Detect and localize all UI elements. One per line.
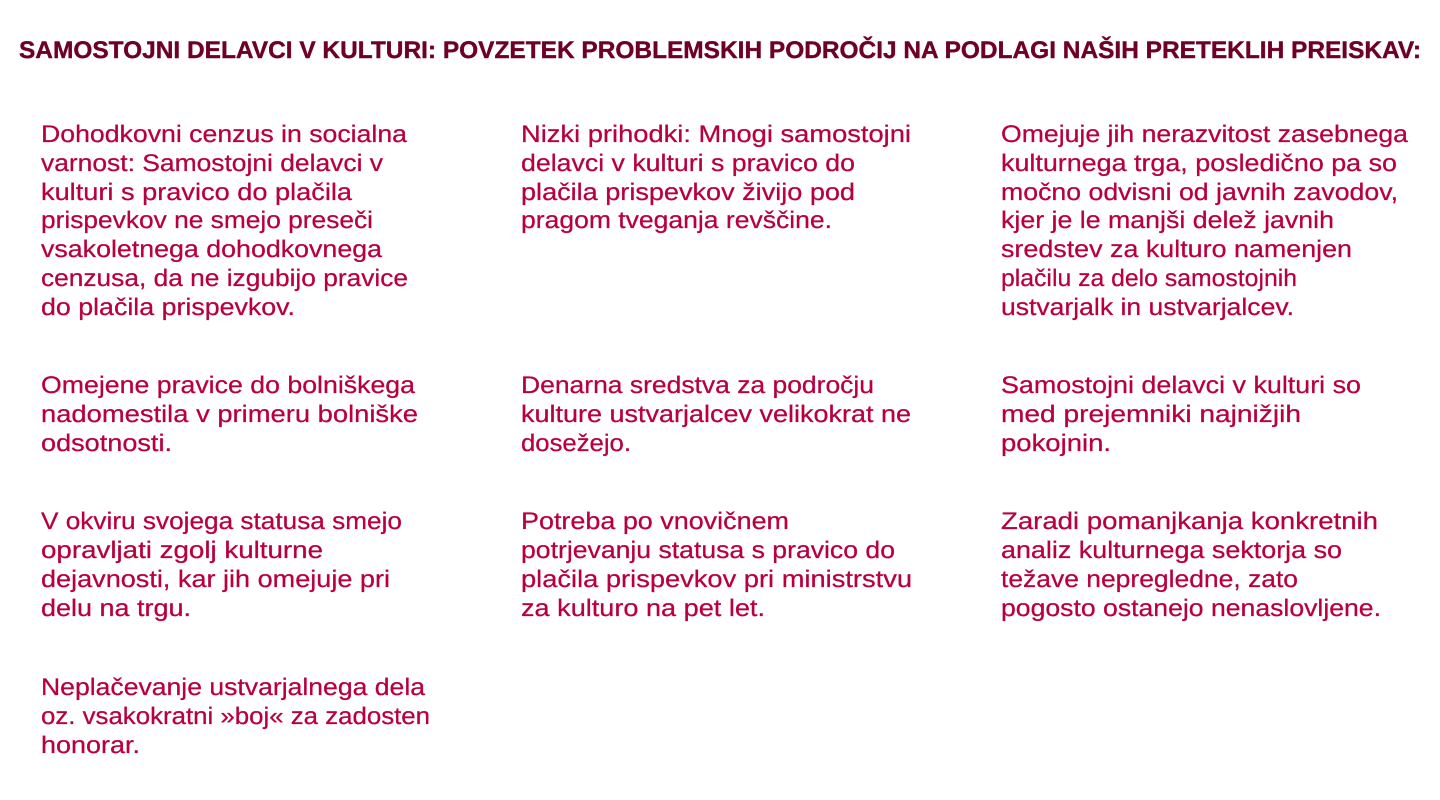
text block: low income: pragom tveganja revščine.	[521, 207, 832, 234]
text block: undeveloped private market	[1001, 121, 1409, 321]
text block: low income: delavci v kulturi s pravico do	[521, 150, 855, 177]
text block: low income: Nizki prihodki: Mnogi samostojni	[521, 121, 911, 148]
text block: status reconfirmation: potrjevanju statusa s pravico do	[521, 537, 895, 564]
text block: funds rarely reach creators	[521, 372, 911, 457]
text block: lowest pensions	[1001, 372, 1361, 457]
text block: limited sick pay: odsotnosti.	[41, 430, 172, 457]
text block: status reconfirmation: plačila prispevkov pri ministrstvu	[521, 566, 912, 593]
text block: undeveloped private market: kulturnega trga, posledično pa so	[1001, 150, 1397, 177]
text block: lack of analyses: pogosto ostanejo nenaslovljene.	[1001, 595, 1381, 622]
text block: income census and social security: kulturi s pravico do plačila	[41, 179, 353, 206]
text block: limited sick pay: nadomestila v primeru bolniške	[41, 401, 418, 428]
text block: funds rarely reach creators: kulture ustvarjalcev velikokrat ne	[521, 401, 911, 428]
text block: unpaid creative work: oz. vsakokratni »boj« za zadosten	[41, 703, 430, 730]
text block: funds rarely reach creators: dosežejo.	[521, 430, 631, 457]
text block: undeveloped private market: sredstev za kulturo namenjen	[1001, 236, 1352, 263]
text block: lack of analyses: analiz kulturnega sektorja so	[1001, 537, 1342, 564]
text block: status reconfirmation	[521, 508, 912, 622]
text block: income census and social security: cenzusa, da ne izgubijo pravice	[41, 265, 408, 292]
text block: undeveloped private market: močno odvisni od javnih zavodov,	[1001, 179, 1398, 206]
text block: lowest pensions: Samostojni delavci v kulturi so	[1001, 372, 1361, 399]
text block: undeveloped private market: kjer je le manjši delež javnih	[1001, 207, 1334, 234]
text block: lack of analyses: težave nepregledne, zato	[1001, 566, 1298, 593]
text block: income census and social security	[41, 121, 408, 321]
text block: only cultural activities allowed: dejavnosti, kar jih omejuje pri	[41, 566, 390, 593]
text block: only cultural activities allowed: V okviru svojega statusa smejo	[41, 508, 402, 535]
text block: only cultural activities allowed: opravljati zgolj kulturne	[41, 537, 323, 564]
text block: undeveloped private market: ustvarjalk in ustvarjalcev.	[1001, 294, 1294, 321]
text block: funds rarely reach creators: Denarna sredstva za področju	[521, 372, 874, 399]
text block: lack of analyses	[1001, 508, 1381, 622]
text block: only cultural activities allowed: delu na trgu.	[41, 595, 191, 622]
text block: lowest pensions: med prejemniki najnižjih	[1001, 401, 1301, 428]
text block: lack of analyses: Zaradi pomanjkanja konkretnih	[1001, 508, 1378, 535]
text block: unpaid creative work	[41, 674, 430, 759]
text block: only cultural activities allowed	[41, 508, 402, 622]
text block: undeveloped private market: plačilu za delo samostojnih	[1001, 265, 1297, 292]
text block: status reconfirmation: Potreba po vnovičnem	[521, 508, 789, 535]
text block: lowest pensions: pokojnin.	[1001, 430, 1111, 457]
text block: limited sick pay	[41, 372, 418, 457]
text block: income census and social security: prispevkov ne smejo preseči	[41, 207, 373, 234]
text block: low income	[521, 121, 911, 234]
text block: income census and social security: vsakoletnega dohodkovnega	[41, 236, 383, 263]
text block: status reconfirmation: za kulturo na pet let.	[521, 595, 765, 622]
text block: limited sick pay: Omejene pravice do bolniškega	[41, 372, 416, 399]
text block: unpaid creative work: honorar.	[41, 732, 140, 759]
text block: low income: plačila prispevkov živijo pod	[521, 179, 855, 206]
text block: income census and social security: varnost: Samostojni delavci v	[41, 150, 383, 177]
text block: unpaid creative work: Neplačevanje ustvarjalnega dela	[41, 674, 426, 701]
text block: undeveloped private market: Omejuje jih nerazvitost zasebnega	[1001, 121, 1409, 148]
text block: income census and social security: Dohodkovni cenzus in socialna	[41, 121, 408, 148]
title: SAMOSTOJNI DELAVCI V KULTURI: POVZETEK PROBLEMSKIH PODROČIJ NA PODLAGI NAŠIH PRETEKLIH PREISKAV:	[19, 36, 1421, 64]
text block: income census and social security: do plačila prispevkov.	[41, 294, 295, 321]
